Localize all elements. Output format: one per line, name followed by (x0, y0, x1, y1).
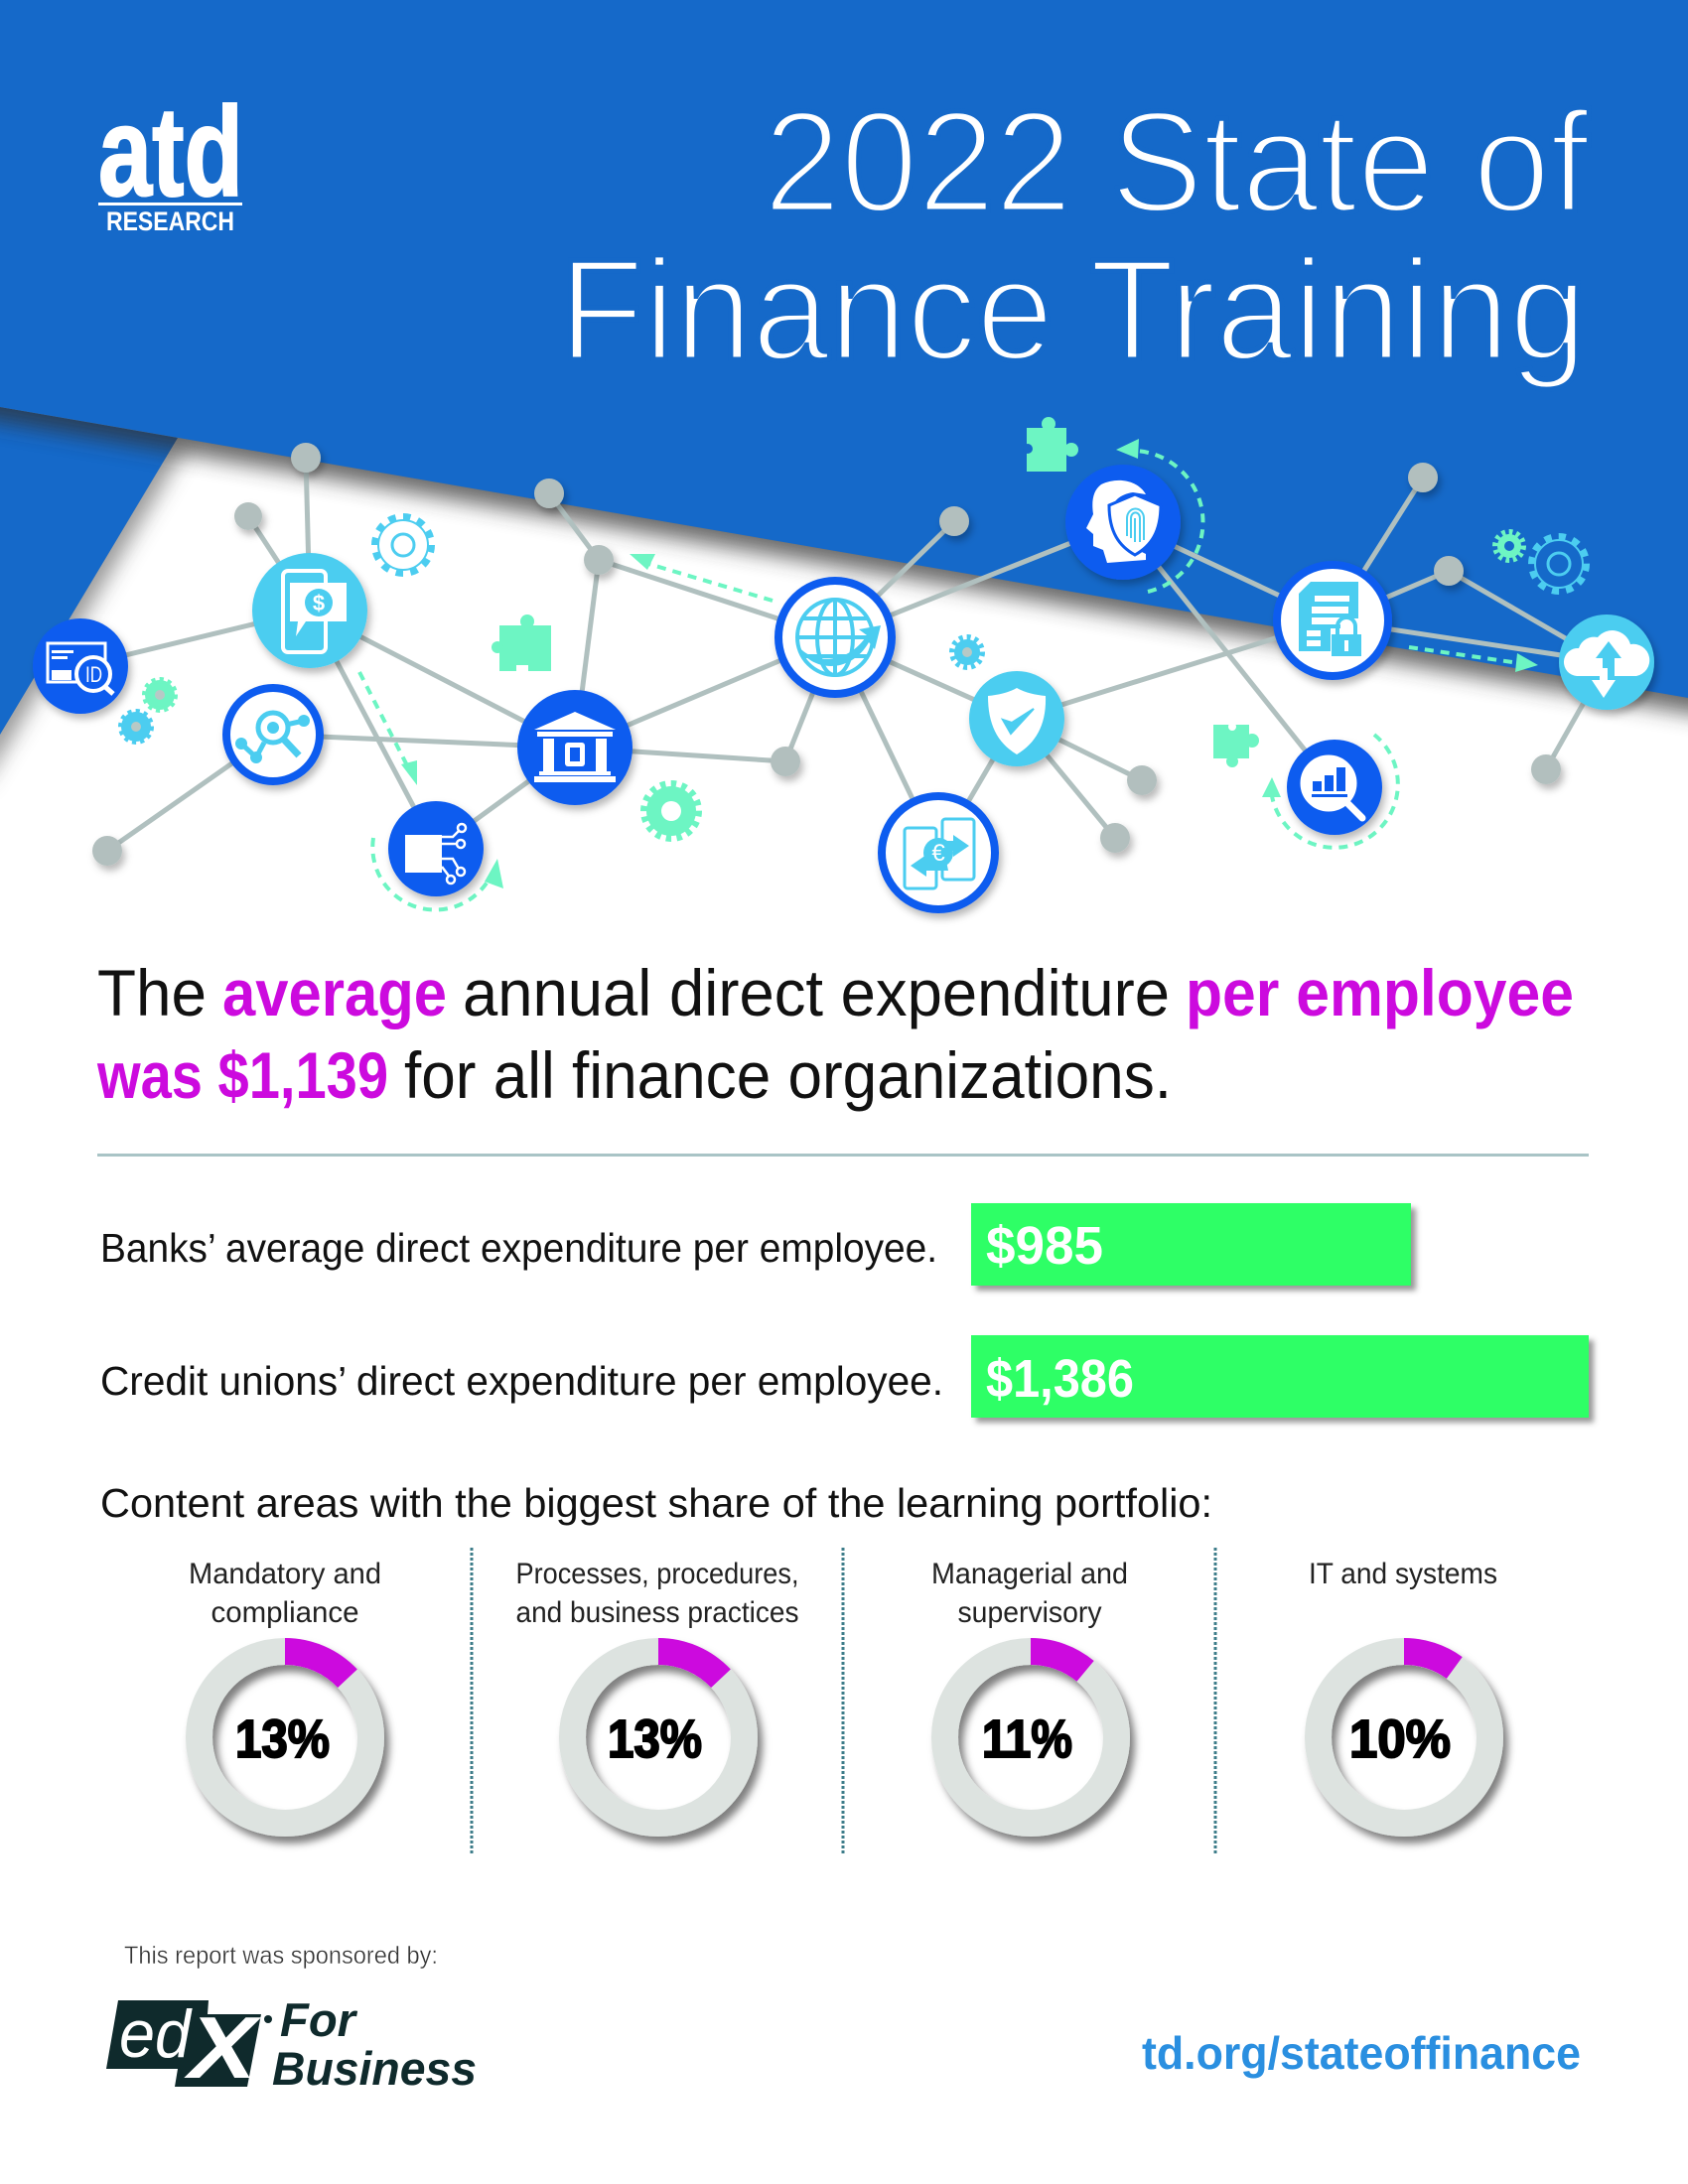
donut: mandatory and compliance: compliance (211, 1596, 359, 1629)
website url: td.org/stateoffinance (1142, 2027, 1581, 2079)
logo: edX for business (106, 1993, 477, 2097)
vertical dotted separators (472, 1548, 1215, 1853)
network illustration (33, 417, 1654, 910)
icon: analytics magnifier (1287, 740, 1382, 835)
puzzle pieces (492, 417, 1259, 767)
icon: ID search: ID (85, 662, 102, 687)
donut: mandatory and compliance (189, 1558, 381, 1823)
icon: phone with dollar bubble (252, 553, 367, 668)
header background band (0, 0, 1688, 790)
headline (96, 956, 1574, 1112)
credit unions expenditure row: $1,386 (986, 1349, 1134, 1409)
credit unions expenditure row: Credit unions’ direct expenditure per employee. (100, 1358, 943, 1404)
donut: IT and systems (1309, 1558, 1497, 1823)
donut: processes, procedures, and business practices: 13% (608, 1709, 702, 1769)
headline: The (97, 956, 207, 1029)
donut: managerial and supervisory: supervisory (957, 1596, 1102, 1629)
credit unions expenditure row (100, 1335, 1589, 1418)
logo: edX for business: Business (272, 2042, 477, 2095)
icon: euro exchange: € (931, 840, 945, 867)
headline: annual direct expenditure (463, 956, 1170, 1029)
icon: shield check (969, 671, 1064, 766)
banks expenditure row (100, 1203, 1411, 1286)
donut: mandatory and compliance: 13% (235, 1709, 330, 1769)
donut: mandatory and compliance: Mandatory and (189, 1558, 381, 1590)
logo: atd research: RESEARCH (106, 206, 234, 236)
dashed arrows (359, 451, 1519, 910)
logo: edX for business: For (280, 1993, 358, 2046)
headline: per employee (1186, 956, 1574, 1029)
logo: edX for business: X (183, 1998, 262, 2097)
donut: managerial and supervisory: Managerial and (931, 1558, 1128, 1590)
title (559, 81, 1590, 390)
donut: processes, procedures, and business practices (516, 1558, 798, 1823)
icon: ID search (33, 618, 128, 714)
icon: globe (778, 581, 892, 694)
icon: euro exchange (882, 796, 995, 909)
headline: was $1,139 (96, 1038, 388, 1112)
sponsor note: This report was sponsored by: (124, 1942, 438, 1970)
donut: managerial and supervisory: 11% (982, 1709, 1072, 1769)
title: Finance Training (559, 229, 1587, 390)
headline: average (222, 956, 447, 1029)
icon: phone with dollar bubble: $ (313, 591, 325, 615)
icon: cloud transfer (1559, 614, 1654, 710)
banks expenditure row: Banks’ average direct expenditure per employee. (100, 1225, 937, 1271)
icon: secure document (1277, 565, 1388, 676)
headline: for all finance organizations. (404, 1038, 1172, 1112)
title: 2022 State of (764, 81, 1590, 242)
donut: IT and systems: IT and systems (1309, 1558, 1497, 1590)
divider (97, 1154, 1589, 1157)
donut: IT and systems: 10% (1349, 1709, 1451, 1769)
banks expenditure row: $985 (986, 1216, 1103, 1276)
content areas heading: Content areas with the biggest share of the learning portfolio: (100, 1480, 1212, 1526)
logo: atd research: atd (98, 81, 243, 223)
small grey nodes (92, 443, 1561, 866)
arrow heads (401, 439, 1538, 888)
donut: managerial and supervisory (931, 1558, 1128, 1823)
icon: data search (226, 688, 320, 781)
donut: processes, procedures, and business practices: Processes, procedures, (516, 1558, 798, 1590)
logo: edX for business: ed (119, 1996, 193, 2072)
donut: processes, procedures, and business practices: and business practices (516, 1596, 798, 1629)
icon: bank (517, 690, 633, 805)
icon: digital wallet (388, 801, 484, 896)
icon: head with fingerprint shield (1065, 465, 1181, 580)
gears (121, 517, 1586, 838)
connector lines (80, 458, 1607, 853)
